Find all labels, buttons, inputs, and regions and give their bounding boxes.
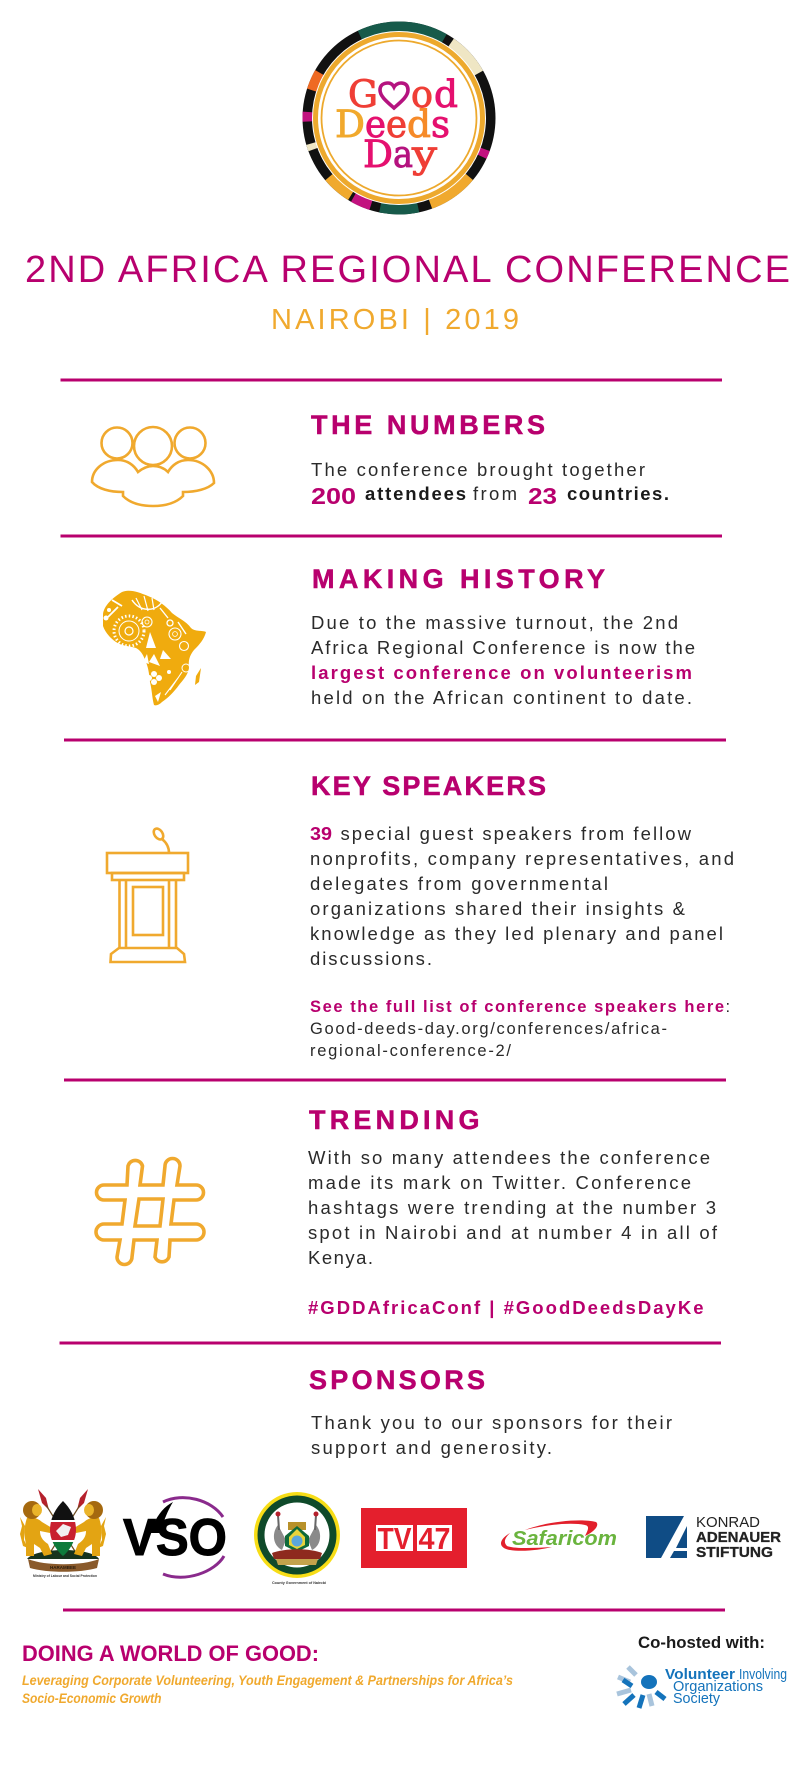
subtitle: NAIROBI | 2019 (271, 304, 519, 336)
text block: hashtags were trending at the number 3 (308, 1197, 716, 1218)
panel: sponsors (20, 1365, 781, 1585)
text block: nonprofits, company representatives, and (310, 848, 734, 869)
text block: 200 (311, 483, 356, 509)
heading: TRENDING (309, 1105, 480, 1135)
logo: County Government of Nairobi: County Government of Nairobi (272, 1581, 326, 1585)
logo: Safaricom (501, 1520, 617, 1551)
logo: Kenya coat of arms: Ministry of Labour and Social Protection (33, 1574, 97, 1578)
heading: KEY SPEAKERS (311, 771, 546, 801)
text block: held on the African continent to date. (311, 687, 692, 708)
link text: See the full list of conference speakers here (310, 998, 724, 1016)
link text: : (726, 998, 730, 1016)
logo wordmark: d (434, 73, 458, 116)
link text (310, 998, 730, 1060)
text block (310, 823, 734, 969)
logo wordmark: d (407, 103, 431, 146)
logo: Konrad Adenauer Stiftung: ADENAUER (696, 1529, 781, 1546)
logo wordmark: y (411, 133, 437, 176)
text block (308, 1147, 718, 1268)
heading: SPONSORS (309, 1365, 485, 1395)
panel: the numbers (92, 410, 669, 509)
text block: Africa Regional Conference is now the (311, 637, 695, 658)
footer: conference theme: Socio-Economic Growth (22, 1690, 162, 1706)
text block: Due to the massive turnout, the 2nd (311, 612, 678, 633)
logo wordmark: e (386, 103, 407, 146)
co-host: Volunteer Involving Organizations Society (617, 1634, 787, 1708)
logo wordmark: s (431, 103, 450, 146)
logo: Konrad Adenauer Stiftung (646, 1514, 781, 1561)
logo wordmark: a (393, 133, 413, 176)
logo wordmark: D (335, 103, 365, 146)
text block: support and generosity. (311, 1437, 552, 1458)
co-host: Volunteer Involving Organizations Society: Co-hosted with: (638, 1634, 765, 1652)
icon: group of people (92, 427, 214, 506)
heading: MAKING HISTORY (312, 564, 605, 594)
logo wordmark: e (365, 103, 386, 146)
text block: organizations shared their insights & (310, 898, 686, 919)
logo wordmark: D (363, 133, 393, 176)
panel: trending (96, 1105, 718, 1318)
text block: delegates from governmental (310, 873, 608, 894)
co-host: Volunteer Involving Organizations Society: Involving (739, 1667, 787, 1683)
logo wordmark: G (348, 73, 378, 116)
footer: conference theme: DOING A WORLD OF GOOD: (22, 1641, 319, 1666)
logo: TV47: 47 (418, 1521, 450, 1556)
panel: making history (103, 564, 695, 708)
text block: With so many attendees the conference (308, 1147, 710, 1168)
text block (311, 459, 669, 509)
text block (311, 1412, 672, 1458)
icon: patterned map of Africa (103, 591, 206, 705)
icon: VIOS emblem (617, 1667, 665, 1708)
text block: discussions. (310, 948, 432, 969)
text block: largest conference on volunteerism (311, 662, 692, 683)
text block: 39 (310, 823, 332, 844)
logo: VSO (123, 1498, 227, 1577)
logo: VSO: VSO (123, 1509, 227, 1567)
co-host: Volunteer Involving Organizations Society: Organizations (673, 1679, 763, 1695)
co-host: Volunteer Involving Organizations Society: Society (673, 1691, 721, 1707)
hashtags: #GDDAfricaConf | #GoodDeedsDayKe (308, 1297, 704, 1318)
title: 2ND AFRICA REGIONAL CONFERENCE (25, 249, 790, 291)
text block: Thank you to our sponsors for their (311, 1412, 672, 1433)
logo: Good Deeds Day (302, 22, 496, 214)
text block: The conference brought together (311, 459, 645, 480)
logo wordmark (335, 73, 458, 176)
logo: TV47 (361, 1508, 467, 1568)
logo wordmark: o (411, 73, 433, 116)
co-host: Volunteer Involving Organizations Society: Volunteer (665, 1667, 735, 1683)
logo: Konrad Adenauer Stiftung: STIFTUNG (696, 1544, 773, 1561)
logo: Kenya coat of arms (20, 1489, 106, 1578)
icon: hashtag (96, 1158, 204, 1264)
link text: Good-deeds-day.org/conferences/africa- (310, 1020, 667, 1038)
logo: County Government of Nairobi (254, 1492, 340, 1585)
text block: attendees (365, 483, 466, 504)
panel: key speakers (107, 771, 734, 1060)
text block: countries. (567, 483, 669, 504)
text block: Kenya. (308, 1247, 373, 1268)
text block: special guest speakers from fellow (340, 823, 692, 844)
icon: podium (107, 827, 188, 962)
text block: from (473, 483, 517, 504)
footer: conference theme: Leveraging Corporate Volunteering, Youth Engagement & Partnerships for Africa’s (22, 1672, 513, 1688)
text block: knowledge as they led plenary and panel (310, 923, 723, 944)
logo: Safaricom: Safaricom (512, 1528, 617, 1550)
logo: Konrad Adenauer Stiftung: KONRAD (696, 1514, 760, 1531)
heading: THE NUMBERS (311, 410, 545, 440)
text block: made its mark on Twitter. Conference (308, 1172, 691, 1193)
text block: spot in Nairobi and at number 4 in all of (308, 1222, 718, 1243)
logo: Kenya coat of arms: HARAMBEE (50, 1565, 76, 1570)
logo: TV47: TV (378, 1521, 412, 1556)
footer: conference theme (22, 1641, 513, 1706)
text block: 23 (528, 483, 557, 509)
link text: regional-conference-2/ (310, 1042, 511, 1060)
text block (311, 612, 695, 708)
